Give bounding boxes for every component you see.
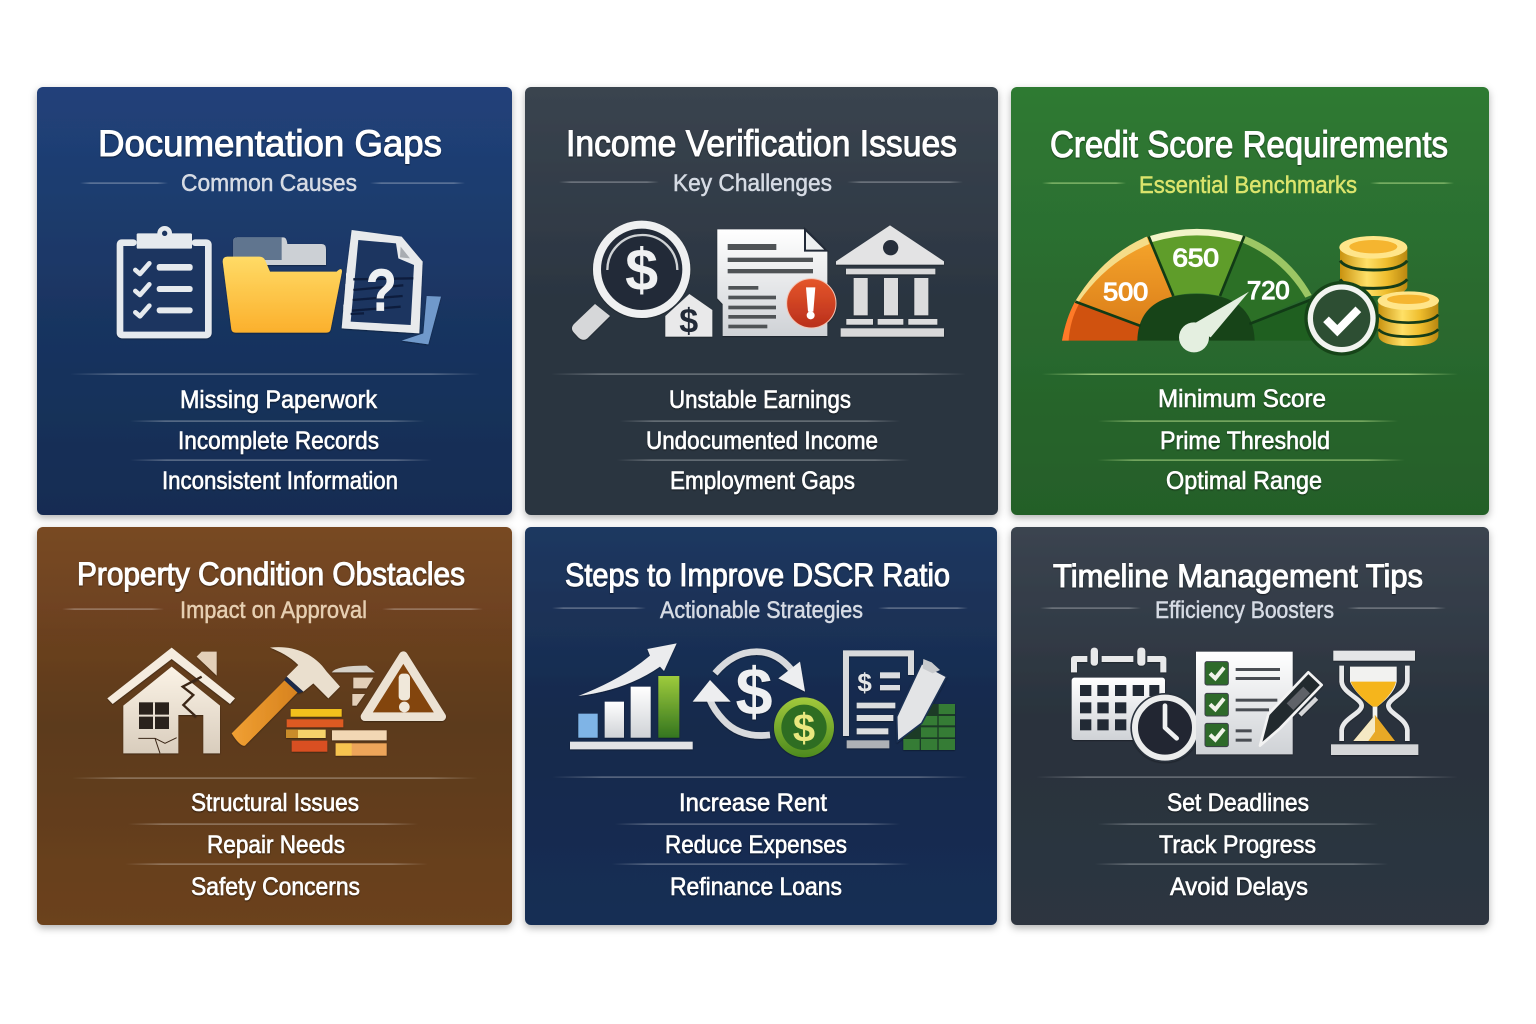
panel: credit score requirements <box>1011 87 1489 515</box>
subheading: common causes: Common Causes <box>181 170 357 197</box>
icons: clipboard, folder, unclear document: ? <box>366 257 397 324</box>
list: challenges: Employment Gaps <box>670 467 855 495</box>
list: benchmarks: Prime Threshold <box>1160 427 1330 455</box>
list: benchmarks: Optimal Range <box>1166 467 1322 495</box>
list: obstacles: Safety Concerns <box>191 873 360 901</box>
icons: growth chart, money cycle, budget document: $ <box>793 707 815 751</box>
list: challenges: Unstable Earnings <box>669 386 851 414</box>
panel: timeline management tips <box>1011 527 1489 925</box>
gauge: 720 <box>1247 277 1290 305</box>
panel: documentation gaps <box>37 87 512 515</box>
heading: steps to improve dscr ratio: Steps to Improve DSCR Ratio <box>565 557 950 593</box>
list: strategies: Increase Rent <box>679 789 827 817</box>
icons: growth chart, money cycle, budget document <box>570 643 955 757</box>
list: obstacles: Repair Needs <box>207 831 345 859</box>
list: causes: Missing Paperwork <box>180 386 377 414</box>
list: strategies <box>612 789 910 901</box>
gauge: 500 <box>1103 278 1148 306</box>
list: tips: Set Deadlines <box>1167 789 1309 817</box>
list: tips: Track Progress <box>1159 831 1316 859</box>
list: obstacles <box>125 789 428 901</box>
icons: growth chart, money cycle, budget document: $ <box>857 668 872 698</box>
panel: income verification issues <box>525 87 998 515</box>
icons: clipboard, folder, unclear document <box>120 226 441 344</box>
icons: magnifier, flagged document, bank: $ <box>625 236 658 303</box>
list: challenges: Undocumented Income <box>646 427 878 455</box>
icons: growth chart, money cycle, budget document: $ <box>735 655 773 729</box>
subheading: actionable strategies: Actionable Strategies <box>660 597 863 624</box>
check badge <box>1304 281 1379 356</box>
list: causes: Incomplete Records <box>178 427 379 455</box>
heading: credit score requirements: Credit Score Requirements <box>1050 124 1448 165</box>
list: benchmarks <box>1097 385 1405 495</box>
subheading: impact on approval: Impact on Approval <box>180 597 367 624</box>
subheading: key challenges: Key Challenges <box>673 170 832 197</box>
icons: calendar clock, checklist, hourglass <box>1072 648 1418 762</box>
list: strategies: Refinance Loans <box>670 873 842 901</box>
gauge <box>1062 229 1323 352</box>
heading: income verification issues: Income Verification Issues <box>566 123 957 164</box>
heading: property condition obstacles: Property Condition Obstacles <box>77 556 465 592</box>
icons: magnifier, flagged document, bank <box>572 225 944 341</box>
icons: cracked house, hammer, bricks, warning <box>107 647 442 756</box>
coin stack <box>1339 236 1439 346</box>
subheading: efficiency boosters: Efficiency Boosters <box>1155 597 1334 624</box>
list: obstacles: Structural Issues <box>191 789 359 817</box>
icons: magnifier, flagged document, bank: $ <box>679 303 698 341</box>
panel: steps to improve dscr ratio <box>525 527 997 925</box>
list: tips: Avoid Delays <box>1170 873 1308 901</box>
list: causes <box>130 386 432 495</box>
heading: documentation gaps: Documentation Gaps <box>98 123 442 164</box>
list: strategies: Reduce Expenses <box>665 831 847 859</box>
list: tips <box>1095 789 1388 901</box>
heading: timeline management tips: Timeline Management Tips <box>1053 558 1423 594</box>
list: causes: Inconsistent Information <box>162 467 398 495</box>
gauge: 650 <box>1172 245 1219 273</box>
list: challenges <box>617 386 910 495</box>
panel: property condition obstacles <box>37 527 512 925</box>
subheading: essential benchmarks: Essential Benchmarks <box>1139 172 1357 199</box>
list: benchmarks: Minimum Score <box>1158 385 1326 413</box>
icons: credit gauge, check badge, coin stacks <box>1062 229 1439 356</box>
